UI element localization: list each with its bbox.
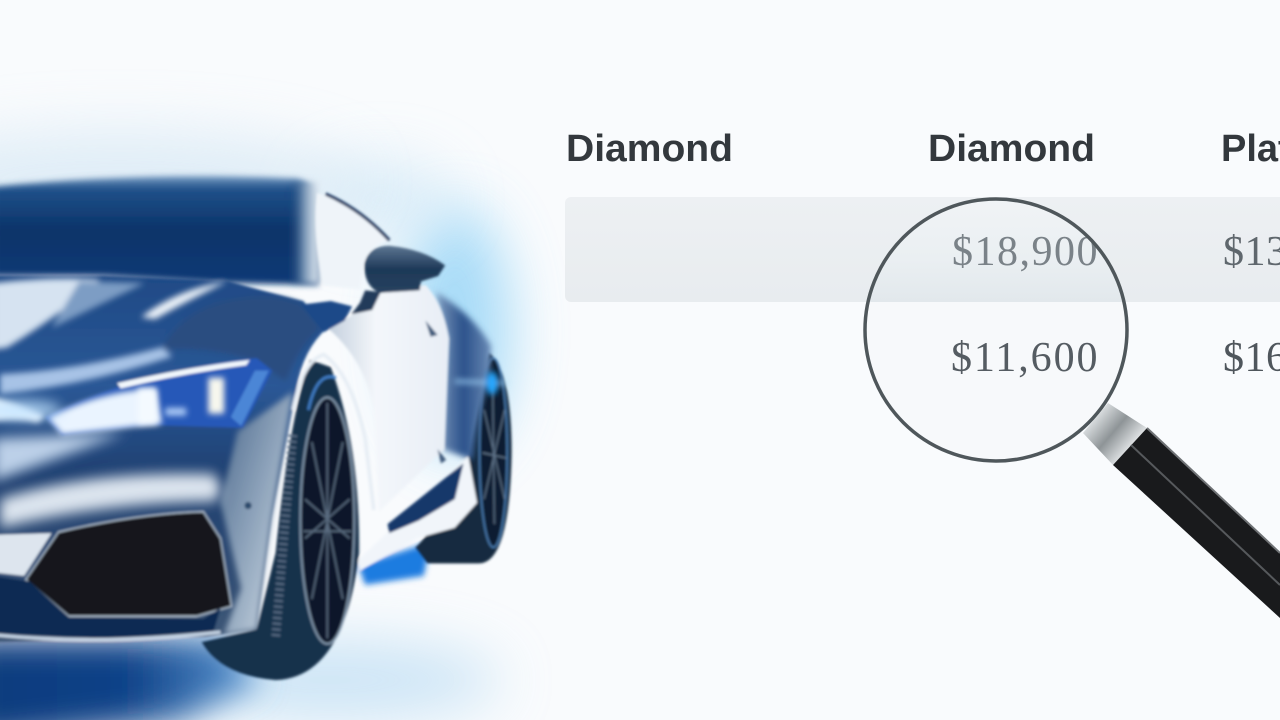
rear haunch (436, 292, 491, 460)
grille (26, 512, 232, 616)
left bumper white (0, 533, 52, 576)
bumper highlight (0, 474, 220, 528)
left headlight glow (0, 400, 62, 420)
fender vent (301, 301, 352, 332)
front wheel (202, 360, 359, 680)
price $18,900: $18,900 (952, 229, 1098, 275)
windshield (0, 176, 319, 285)
headlight (45, 358, 272, 436)
ground shadow (0, 542, 431, 720)
header: Diamond column 1: Diamond (566, 128, 733, 170)
lower face sheen (0, 433, 124, 481)
centre light strip (0, 397, 45, 422)
collar (1083, 403, 1147, 465)
side sill (358, 456, 477, 571)
car photo (0, 130, 512, 720)
spokes (303, 403, 351, 638)
tyre highlight (308, 377, 336, 410)
tyre (202, 360, 359, 680)
body shell (0, 276, 327, 642)
rim (300, 397, 354, 644)
hood highlights (0, 278, 227, 349)
tread (276, 435, 293, 638)
highlighted row band (565, 197, 1280, 302)
car blue glow (0, 130, 510, 720)
rear light flare (455, 372, 506, 395)
lens interior (860, 195, 1130, 465)
price $11,600: $11,600 (951, 335, 1098, 381)
bumper corner (220, 392, 293, 635)
lower lip (0, 576, 220, 640)
wheel arch (293, 355, 374, 510)
mirror (364, 246, 445, 293)
mirror stem (351, 290, 381, 314)
table (565, 128, 1280, 381)
lens ring (865, 199, 1127, 461)
door details (425, 321, 446, 463)
fender shading (0, 296, 320, 394)
sensor (245, 502, 251, 509)
door panel (327, 285, 449, 512)
header: Diamond column 2: Diamond (928, 128, 1095, 170)
rear wheel (415, 353, 512, 563)
window trim (326, 194, 389, 240)
magnifying glass (860, 195, 1280, 618)
side window (315, 193, 390, 289)
windshield pillar (288, 182, 319, 284)
handle (1113, 428, 1280, 618)
